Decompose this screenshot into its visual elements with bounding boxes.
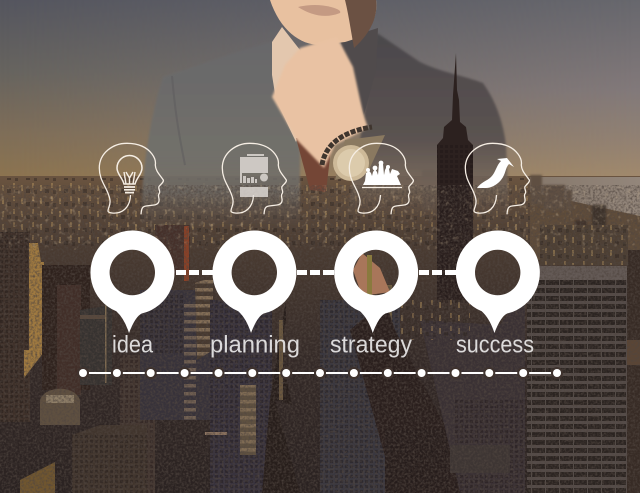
icon: head with chess pieces (349, 143, 413, 214)
hand (272, 37, 368, 168)
label: success: success (456, 332, 534, 358)
map pin: planning (212, 231, 296, 333)
label: strategy: strategy (330, 332, 412, 358)
wristwatch and beads (322, 127, 385, 181)
icon: head with rising arrow (465, 143, 529, 214)
lower left towers (0, 232, 155, 493)
city grain texture (0, 185, 640, 493)
label: planning: planning (210, 332, 300, 358)
suit left (140, 42, 300, 230)
distant skyline (422, 170, 606, 260)
dashed connector: planning to strategy (297, 270, 334, 275)
map pin: idea (90, 231, 174, 333)
map pin: success (456, 231, 540, 333)
central buildings (140, 225, 525, 493)
right office building (527, 225, 640, 493)
face (270, 0, 376, 45)
label: idea: idea (112, 332, 154, 358)
dashed connector: idea to planning (176, 270, 213, 275)
Empire State Building (437, 53, 473, 300)
timeline with dots (77, 367, 563, 379)
map pin: strategy (334, 231, 418, 333)
tie reflection inside strategy pin (353, 253, 390, 296)
icon: head with lightbulb (99, 143, 163, 214)
dashed connector: strategy to success (419, 270, 456, 275)
suit right (345, 33, 510, 225)
shirt and tie (272, 27, 300, 142)
icon: head with document (222, 143, 286, 214)
